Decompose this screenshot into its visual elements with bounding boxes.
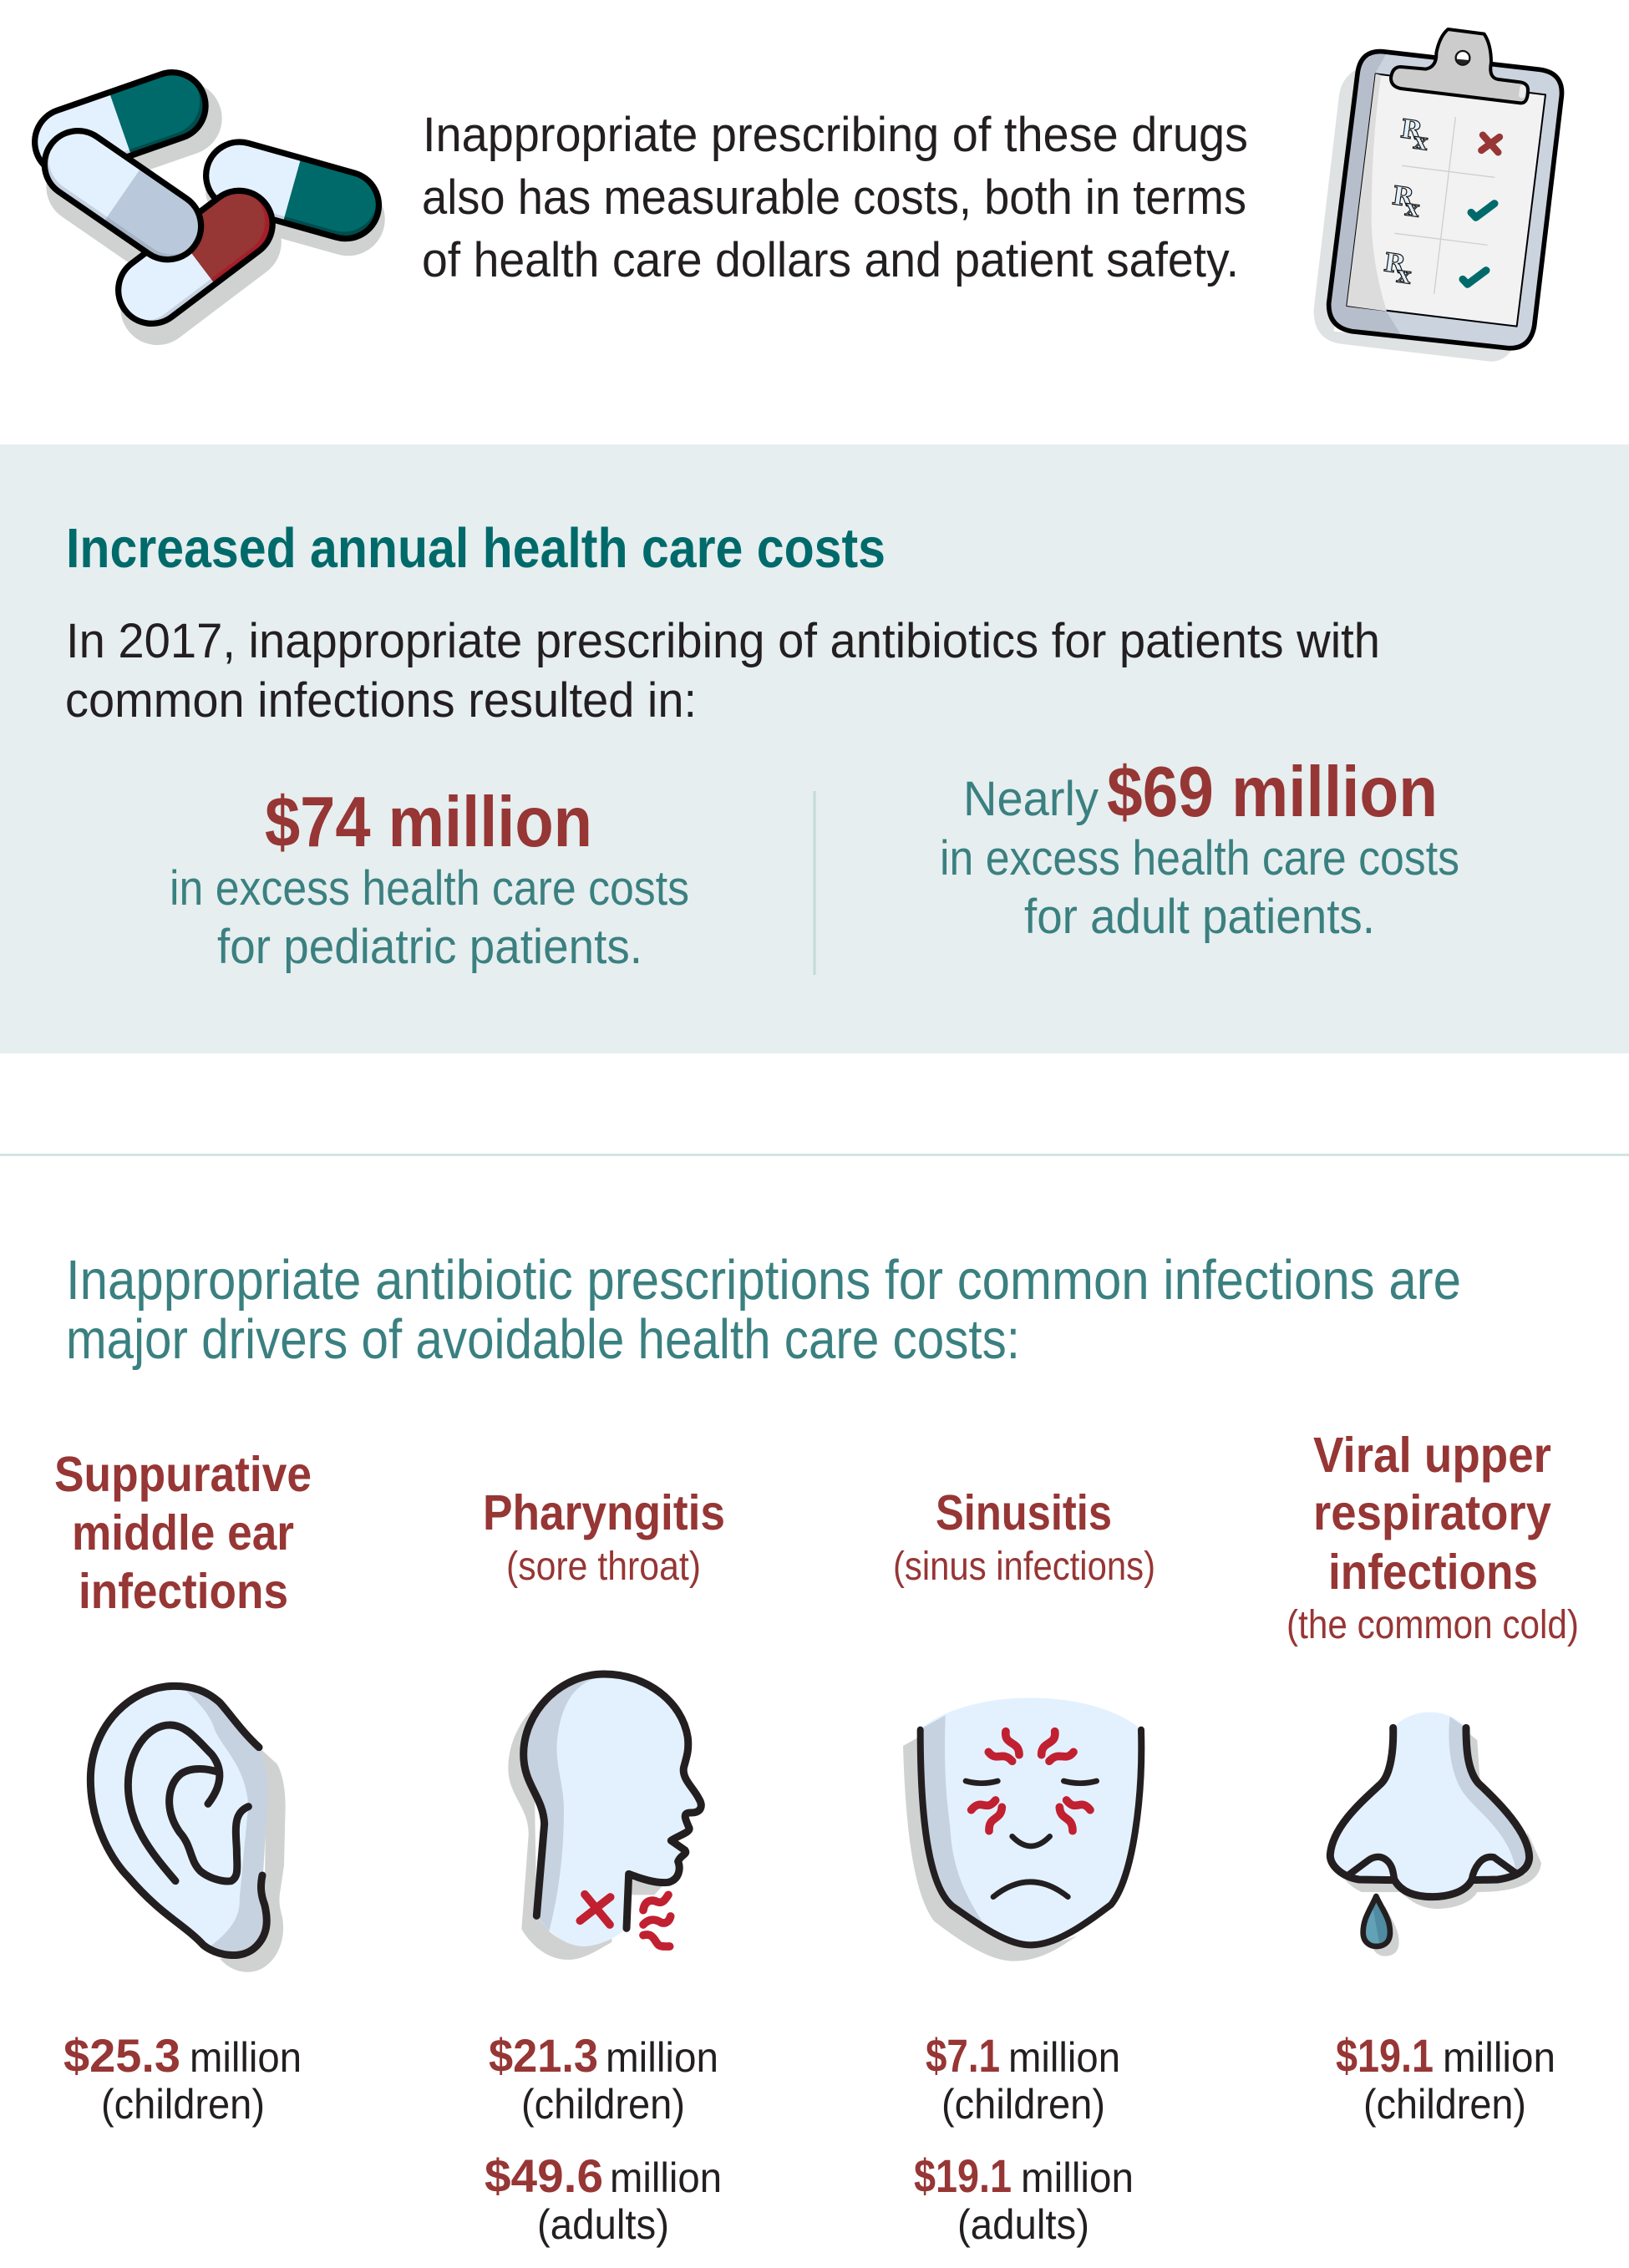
- intro text block: [422, 108, 1248, 287]
- callout: adult cost: in excess health care costs: [940, 831, 1459, 885]
- icon: clipboard with prescriptions: x: [1395, 261, 1413, 290]
- heading: major drivers of avoidable costs: [66, 1249, 1461, 1371]
- column: sinusitis: [893, 1485, 1155, 2248]
- condition name: common cold: respiratory: [1313, 1485, 1551, 1540]
- icon: antibiotic capsules: [32, 69, 385, 345]
- cost: sinusitis: (adults): [957, 2201, 1089, 2248]
- condition name: pharyngitis: (sore throat): [506, 1545, 701, 1589]
- cost: pharyngitis: $21.3: [489, 2029, 598, 2082]
- cost: common cold: [1336, 2029, 1555, 2128]
- callout: adult cost: [940, 753, 1459, 944]
- icon: clipboard with prescriptions: x: [1412, 128, 1430, 156]
- condition name: sinusitis: [893, 1485, 1155, 1589]
- cost: sinusitis: $7.1: [926, 2029, 1000, 2082]
- icon: runny nose: [1330, 1712, 1541, 1956]
- panel intro text: [65, 614, 1380, 728]
- condition name: ear: infections: [79, 1564, 288, 1619]
- cost: common cold: (children): [1363, 2081, 1526, 2128]
- panel: increased annual health care costs: [0, 444, 1629, 1053]
- cost: common cold: million: [1443, 2034, 1555, 2081]
- heading: major drivers of avoidable costs: Inappropriate antibiotic prescriptions for common infections are: [66, 1249, 1461, 1312]
- cost: pharyngitis: (adults): [537, 2201, 669, 2248]
- cost: ear: million: [190, 2034, 302, 2081]
- icon: clipboard with prescriptions: R: [1398, 114, 1424, 147]
- condition name: sinusitis: (sinus infections): [893, 1545, 1155, 1589]
- cost: pharyngitis: [485, 2029, 722, 2248]
- condition name: ear: [54, 1447, 312, 1619]
- cost: sinusitis: [914, 2029, 1134, 2248]
- callout: adult cost: Nearly: [963, 772, 1099, 826]
- condition name: pharyngitis: [483, 1485, 725, 1589]
- column: viral upper respiratory infections: [1286, 1428, 1579, 2128]
- icon: clipboard with prescriptions: R: [1382, 247, 1408, 281]
- condition name: common cold: (the common cold): [1286, 1603, 1579, 1647]
- heading: major drivers of avoidable costs: major drivers of avoidable health care costs:: [66, 1308, 1020, 1371]
- icon: ear: [90, 1686, 286, 1972]
- cost: common cold: $19.1: [1336, 2029, 1434, 2082]
- cost: pharyngitis: (children): [521, 2081, 685, 2128]
- panel intro text: In 2017, inappropriate prescribing of antibiotics for patients with: [66, 614, 1380, 668]
- cost: sinusitis: million: [1021, 2154, 1134, 2201]
- panel intro text: common infections resulted in:: [65, 673, 697, 728]
- callout: adult cost: $69 million: [1107, 753, 1438, 832]
- heading: increased annual costs: Increased annual health care costs: [66, 517, 886, 580]
- cost: sinusitis: million: [1008, 2034, 1120, 2081]
- callout: pediatric cost: [170, 783, 689, 974]
- condition name: common cold: infections: [1328, 1545, 1538, 1600]
- icon: clipboard with prescriptions: [1314, 29, 1562, 362]
- callout: pediatric cost: $74 million: [265, 783, 592, 862]
- cost: pharyngitis: $49.6: [485, 2149, 603, 2202]
- column: pharyngitis: [483, 1485, 725, 2248]
- cost: sinusitis: (children): [941, 2081, 1105, 2128]
- icon: face with sinus pain: [903, 1697, 1141, 1961]
- condition name: ear: Suppurative: [54, 1447, 312, 1502]
- cost: ear: [63, 2029, 302, 2128]
- intro text block: also has measurable costs, both in terms: [422, 170, 1246, 225]
- icon: clipboard with prescriptions: x: [1403, 195, 1422, 223]
- condition name: sinusitis: Sinusitis: [936, 1485, 1112, 1540]
- callout: adult cost: for adult patients.: [1024, 890, 1375, 944]
- cost: sinusitis: $19.1: [914, 2149, 1012, 2202]
- intro text block: Inappropriate prescribing of these drugs: [423, 108, 1248, 162]
- cost: pharyngitis: million: [606, 2034, 718, 2081]
- cost: pharyngitis: million: [610, 2154, 722, 2201]
- condition name: pharyngitis: Pharyngitis: [483, 1485, 725, 1540]
- condition name: common cold: Viral upper: [1313, 1428, 1551, 1483]
- cost: ear: (children): [101, 2081, 265, 2128]
- intro text block: of health care dollars and patient safety.: [422, 233, 1239, 287]
- cost: ear: $25.3: [63, 2029, 180, 2082]
- condition name: ear: middle ear: [72, 1505, 294, 1560]
- icon: clipboard with prescriptions: R: [1390, 180, 1416, 214]
- callout: pediatric cost: in excess health care costs: [170, 861, 689, 916]
- column: middle ear infections: [54, 1447, 312, 2128]
- condition name: common cold: [1286, 1428, 1579, 1647]
- callout: pediatric cost: for pediatric patients.: [217, 920, 642, 974]
- icon: head and throat: [508, 1674, 701, 1960]
